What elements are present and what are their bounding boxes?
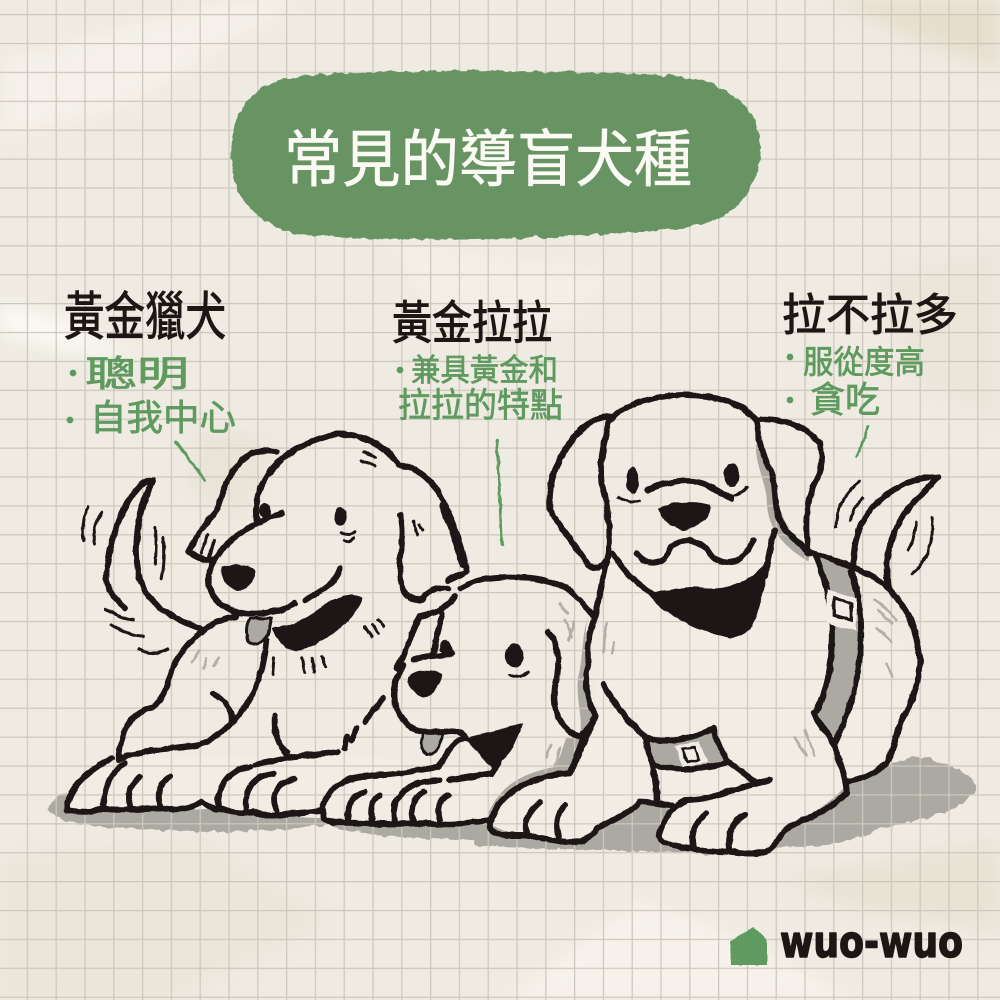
collar	[272, 595, 362, 650]
body	[118, 617, 338, 765]
bullet list: labrador traits: 貪吃	[810, 379, 880, 420]
tongue	[246, 618, 272, 644]
left ear and brow	[397, 597, 455, 668]
eyes	[259, 503, 347, 526]
right ear	[548, 632, 595, 737]
tongue	[421, 733, 443, 755]
title banner	[231, 71, 760, 239]
dog body fills	[67, 437, 920, 852]
dog: labrador	[550, 395, 938, 854]
description: goldador traits: 拉拉的特點	[398, 387, 563, 425]
nose	[408, 671, 442, 697]
head	[570, 395, 810, 773]
heading: golden retriever: 黃金獵犬	[64, 289, 226, 347]
jaw	[613, 530, 775, 597]
collar	[645, 728, 755, 782]
logo wordmark: wuo-wuo	[780, 917, 963, 968]
mouth	[637, 540, 753, 563]
bullet list: labrador traits: 服從度高	[803, 344, 925, 380]
thick ear edge	[443, 507, 463, 563]
far eye	[438, 640, 452, 656]
muzzle	[209, 513, 295, 614]
ear tuft	[202, 535, 214, 557]
eyelid	[510, 672, 528, 677]
logo	[730, 917, 963, 968]
muzzle	[394, 665, 467, 738]
nose	[221, 565, 256, 591]
right ear	[762, 419, 822, 553]
front paw	[490, 738, 672, 842]
left ear	[188, 451, 277, 560]
head	[460, 577, 593, 617]
eyelids	[619, 487, 747, 502]
smile	[305, 568, 340, 600]
nose	[658, 502, 710, 531]
collar buckle	[675, 742, 708, 767]
bullet list: golden retriever traits	[67, 353, 236, 438]
front legs	[603, 685, 847, 854]
ground shadow	[48, 747, 977, 854]
harness strap	[813, 555, 862, 742]
heading: labrador: 拉不拉多	[782, 291, 958, 340]
bullet list: labrador traits	[787, 344, 925, 420]
paws	[323, 698, 498, 825]
bullet list: golden retriever traits: 自我中心	[90, 397, 236, 438]
logo icon: house	[730, 927, 767, 965]
muzzle	[647, 481, 732, 498]
heading: golden retriever	[64, 289, 236, 438]
dog: goldador	[323, 577, 672, 842]
bullet list: golden retriever traits: 聰明	[85, 353, 189, 394]
head and right ear	[256, 434, 467, 600]
left ear	[550, 417, 610, 567]
harness buckle	[827, 589, 857, 631]
description: goldador traits	[397, 353, 563, 425]
neck shadow	[647, 563, 766, 638]
body	[810, 552, 920, 782]
heading: goldador	[392, 297, 563, 425]
title text: 常見的導盲犬種	[284, 126, 692, 195]
tail	[106, 480, 200, 628]
eyes	[626, 463, 739, 493]
eye	[505, 643, 523, 667]
tail	[853, 477, 938, 587]
heading: labrador	[782, 291, 958, 420]
dog: golden retriever	[67, 434, 467, 815]
open mouth	[465, 723, 523, 770]
description: goldador traits: 兼具黃金和	[411, 353, 558, 388]
paws	[67, 758, 323, 815]
heading: goldador: 黃金拉拉	[392, 297, 552, 349]
motion marks and fur	[82, 452, 423, 674]
pointer lines	[176, 427, 868, 545]
